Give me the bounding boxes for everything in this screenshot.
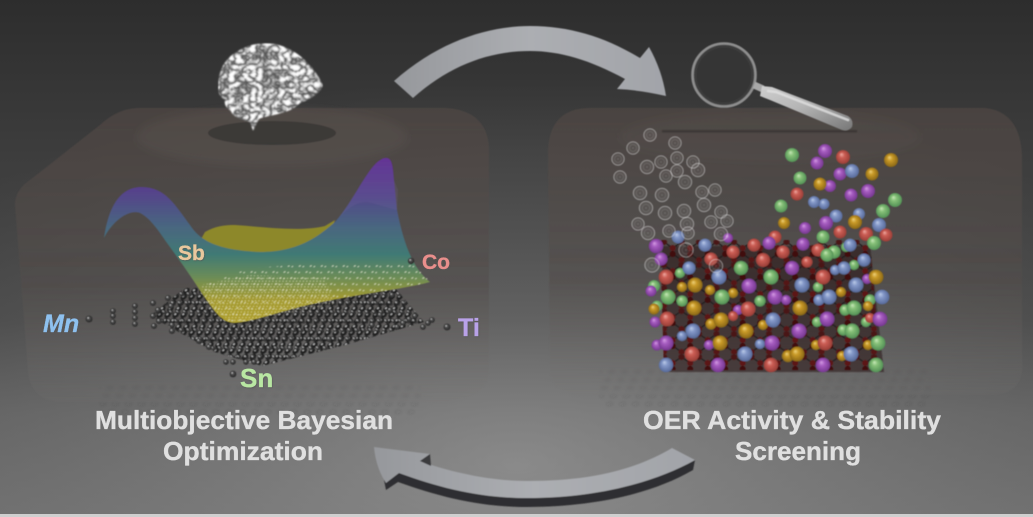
heading: right: OER Activity & Stability bbox=[643, 405, 942, 435]
panel: right translucent box bbox=[548, 108, 1022, 410]
heading: left second line: Optimization bbox=[163, 436, 323, 466]
heading: right second line: Screening bbox=[735, 436, 861, 466]
front layer atoms bbox=[649, 230, 889, 372]
panel: left translucent box bbox=[15, 107, 489, 419]
icon: brain bbox=[218, 43, 323, 131]
chart: crystal lattice with metal oxide atoms bbox=[646, 230, 889, 372]
label: Mn: Mn bbox=[43, 310, 79, 338]
arrow: bottom curved arrow bbox=[374, 447, 695, 507]
lattice shadow body bbox=[662, 246, 884, 372]
arrow: top curved arrow bbox=[394, 26, 666, 98]
heading: left: Multiobjective Bayesian bbox=[95, 405, 393, 435]
atoms: vacant glass spheres bbox=[612, 128, 734, 273]
label: Co: Co bbox=[422, 251, 450, 274]
label: Sn: Sn bbox=[240, 363, 273, 393]
label: Sb: Sb bbox=[178, 242, 205, 265]
icon: magnifying glass bbox=[692, 44, 852, 131]
atoms: falling coloured metal atoms bbox=[774, 144, 902, 250]
label: Ti: Ti bbox=[458, 314, 480, 342]
oxygen network bbox=[660, 240, 880, 370]
chart: sampled composition points below the surface bbox=[86, 285, 450, 377]
back layer atoms bbox=[646, 233, 876, 362]
chart: Bayesian optimization surface bbox=[104, 158, 435, 327]
